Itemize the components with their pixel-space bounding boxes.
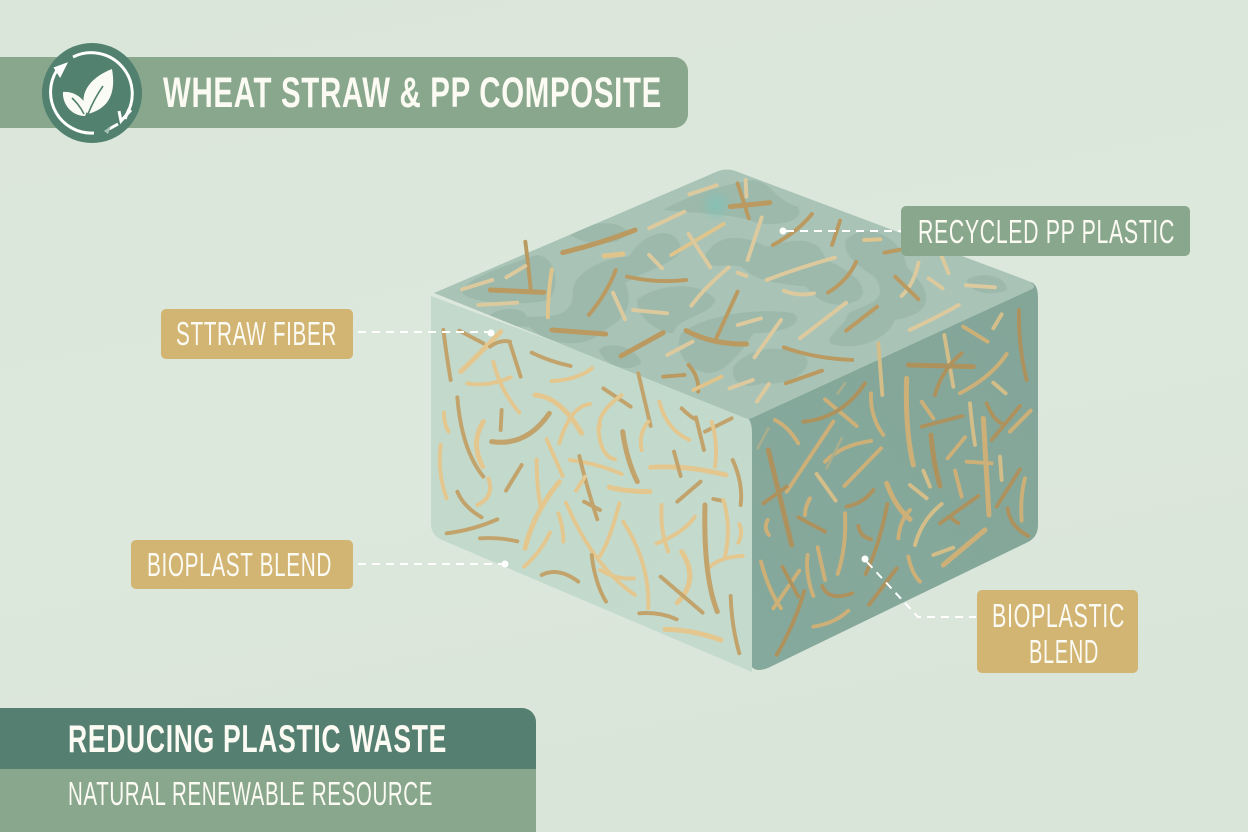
left face straw fibers (440, 330, 743, 653)
subheading: natural renewable resource: NATURAL RENEWABLE RESOURCE (68, 775, 433, 812)
left face of block (431, 296, 752, 672)
callout: recycled PP plastic (780, 206, 1190, 256)
icon: recycling leaf badge (42, 43, 142, 143)
callout: bioplastic blend: BIOPLASTIC (992, 597, 1125, 634)
top face of block (434, 170, 1034, 419)
heading: reducing plastic waste: REDUCING PLASTIC WASTE (68, 718, 447, 761)
callout: straw fiber (161, 309, 494, 359)
heading: reducing plastic waste (0, 708, 536, 769)
top face mottled matrix (462, 180, 1007, 386)
panel: bottom message (0, 708, 536, 832)
top face straw fibers (462, 180, 995, 402)
right face straw fibers (758, 310, 1031, 655)
callout: bioplast blend (131, 540, 508, 589)
title: WHEAT STRAW & PP COMPOSITE (163, 69, 662, 117)
right face of block (740, 282, 1038, 670)
composite block illustration (431, 170, 1038, 672)
callout: bioplastic blend (862, 556, 1138, 673)
header banner (0, 57, 688, 128)
subheading: natural renewable resource (0, 769, 536, 832)
callout: bioplast blend: BIOPLAST BLEND (147, 546, 332, 583)
teal highlight (699, 188, 733, 222)
callout: straw fiber: STTRAW FIBER (176, 315, 337, 352)
callout: bioplastic blend: BLEND (1029, 633, 1099, 670)
